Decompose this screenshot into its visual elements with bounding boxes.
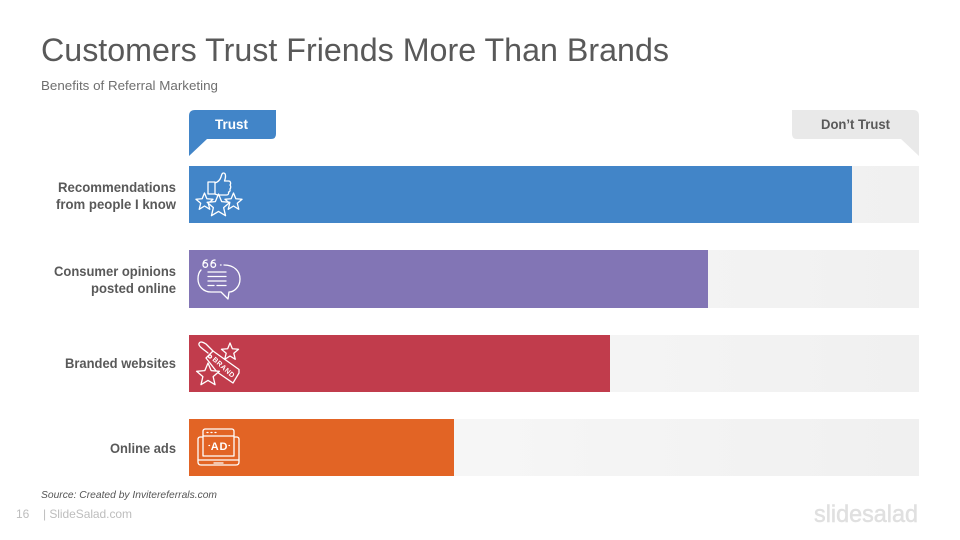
label: consumer opinions: Consumer opinions [54, 263, 176, 279]
flag: trust [189, 110, 276, 156]
bar: branded websites [189, 335, 610, 392]
bar track: online ads [189, 419, 919, 476]
bar: online ads [189, 419, 454, 476]
page number: 16 [16, 507, 30, 521]
label: branded websites: Branded websites [65, 355, 176, 371]
subtitle: Benefits of Referral Marketing [41, 79, 218, 93]
title: Customers Trust Friends More Than Brands [41, 32, 669, 68]
brand logo: slidesalad [814, 501, 918, 528]
label: consumer opinions [54, 263, 176, 296]
bar: consumer opinions [189, 250, 708, 308]
flag: trust: Trust [215, 116, 248, 132]
icon: laptop with ad: AD [211, 441, 228, 453]
bar track: recommendations [189, 166, 919, 223]
icon: thumbs up with stars [196, 173, 242, 216]
bar track: consumer opinions [189, 250, 919, 308]
row: recommendations [56, 166, 919, 223]
bar track: branded websites [189, 335, 919, 392]
label: recommendations: Recommendations [58, 179, 176, 195]
label: recommendations [56, 179, 176, 212]
flag: don't trust [792, 110, 919, 156]
footer site name: | SlideSalad.com [43, 507, 132, 521]
bar: recommendations [189, 166, 852, 223]
row: branded websites [65, 335, 919, 392]
label: online ads: Online ads [110, 440, 176, 456]
row: online ads [110, 419, 919, 476]
icon: laptop with ad [198, 429, 239, 465]
icon: brand tag with stars [197, 342, 239, 385]
row: consumer opinions [54, 250, 919, 308]
source note: Source: Created by Invitereferrals.com [41, 489, 217, 501]
label: recommendations: from people I know [56, 196, 176, 212]
icon: brand tag with stars: BRAND [211, 356, 235, 380]
flag: don't trust: Don’t Trust [821, 116, 890, 132]
label: consumer opinions: posted online [91, 280, 176, 296]
icon: speech bubble with quotes [198, 260, 240, 299]
